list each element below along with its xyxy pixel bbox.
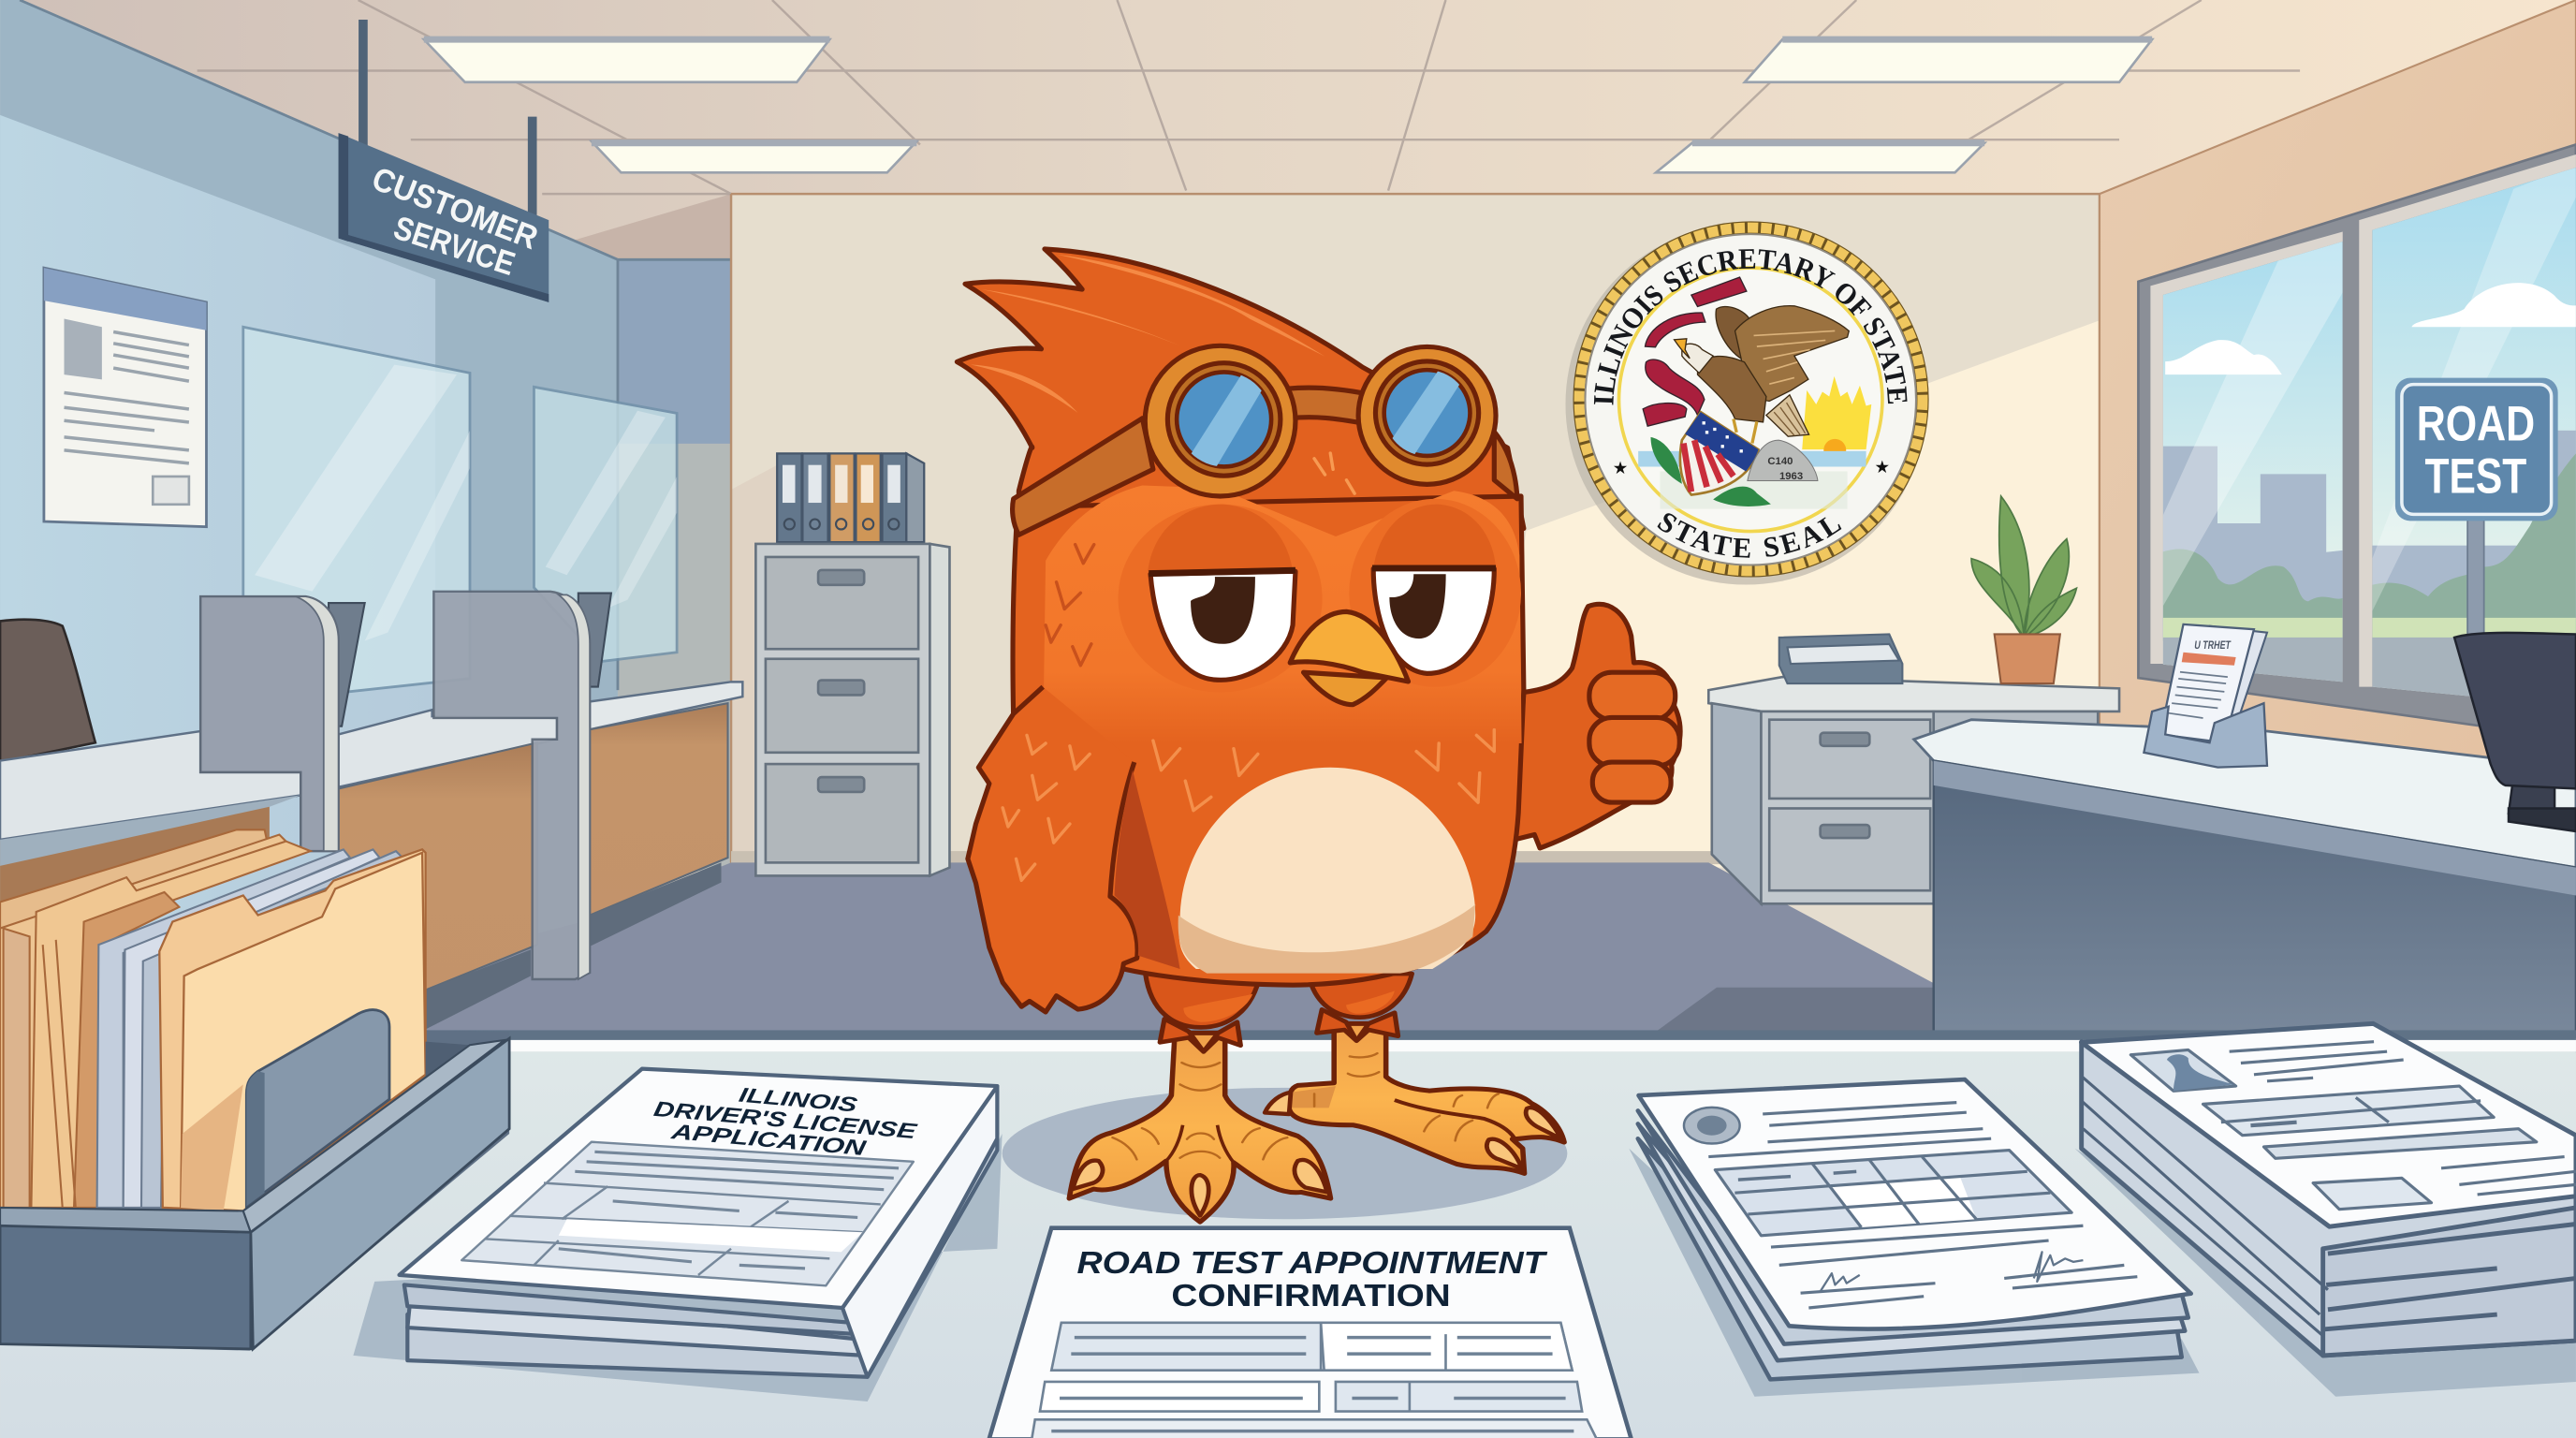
manila folders <box>0 829 311 1208</box>
seal shield <box>1680 412 1759 495</box>
seal rock and leaves <box>1651 437 1818 506</box>
front manila folder <box>159 849 426 1211</box>
reception desk <box>1914 720 2576 1051</box>
head crest <box>957 249 1524 539</box>
road test appointment confirmation <box>989 1228 1632 1438</box>
foreground desk <box>0 1030 2576 1438</box>
driver's license application stack <box>400 1069 997 1377</box>
foot shadow <box>1003 1088 1567 1219</box>
id document stack <box>2082 1023 2576 1356</box>
seal rock and leaves: 1963 <box>1779 471 1803 482</box>
seal eagle <box>1675 306 1849 444</box>
tray front face <box>0 1208 251 1232</box>
confirmation title: CONFIRMATION <box>1171 1279 1451 1313</box>
body <box>1013 496 1524 985</box>
computer monitor <box>2454 633 2576 831</box>
chair <box>0 620 95 762</box>
confirmation title: ROAD TEST APPOINTMENT <box>1076 1246 1548 1281</box>
right wall <box>2100 0 2576 920</box>
window <box>2136 144 2576 740</box>
customer service sign <box>339 20 549 302</box>
grey folders <box>97 849 402 1208</box>
beak <box>1290 611 1408 705</box>
brochure holder <box>2144 624 2267 768</box>
owl legs and feet <box>1069 974 1564 1222</box>
seal rock and leaves: C140 <box>1767 456 1793 467</box>
brochure holder: U TRHET <box>2193 638 2232 652</box>
customer service sign: CUSTOMER <box>367 160 543 257</box>
desk monitors and dividers <box>200 592 611 979</box>
paper tray on back desk <box>1779 634 1902 683</box>
customer service sign: SERVICE <box>389 210 520 283</box>
owl mascot <box>957 249 1680 1012</box>
document shadows <box>353 1134 2576 1401</box>
ceiling <box>0 0 2576 259</box>
application title <box>651 1083 919 1160</box>
leg tufts and thighs <box>1146 974 1412 1051</box>
grey divider <box>246 1010 389 1206</box>
belly <box>1179 768 1475 969</box>
owl left foot <box>1069 1033 1330 1222</box>
application form <box>461 1142 914 1285</box>
inner tray corner <box>426 1042 470 1077</box>
eye sockets <box>1119 499 1521 692</box>
eyes <box>1149 568 1496 680</box>
potted plant <box>1971 496 2076 683</box>
id document content <box>2130 1042 2576 1210</box>
back wall <box>731 194 2100 868</box>
filing cabinet <box>755 544 949 875</box>
state seal: ILLINOIS SECRETARY OF STATE <box>1593 249 1908 404</box>
wall poster <box>44 268 206 527</box>
binders <box>777 453 924 542</box>
application title: DRIVER'S LICENSE <box>651 1096 919 1143</box>
road test sign: ROAD <box>2417 396 2535 451</box>
state seal: ★ <box>1875 457 1890 477</box>
confirmation title <box>1076 1246 1548 1313</box>
right arm with thumbs up <box>1513 604 1680 848</box>
road test sign: TEST <box>2424 449 2526 505</box>
service counters <box>0 682 742 1030</box>
headband <box>1013 388 1517 535</box>
left wing <box>968 687 1137 1012</box>
road test sign <box>2395 378 2558 636</box>
tray back <box>0 1030 509 1351</box>
goggles <box>1145 345 1496 496</box>
state seal: ★ <box>1613 458 1629 477</box>
state seal: STATE SEAL <box>1657 513 1842 558</box>
folder tray with folders <box>0 829 509 1351</box>
confirmation form <box>1032 1323 1597 1438</box>
application title: ILLINOIS <box>737 1083 859 1116</box>
floor <box>337 862 1939 1042</box>
signed document stack <box>1638 1079 2191 1379</box>
owl right foot <box>1265 1023 1564 1173</box>
glass partitions <box>243 327 677 692</box>
left wall <box>0 0 731 1051</box>
back desk with drawers <box>1708 677 2119 903</box>
seal ribbon <box>1643 277 1747 426</box>
state seal <box>1565 221 1929 584</box>
tray side face <box>243 1040 505 1232</box>
application title: APPLICATION <box>668 1119 868 1160</box>
feather marks <box>1003 453 1494 880</box>
lighter face area <box>1043 486 1522 743</box>
ceiling lights <box>424 39 2152 172</box>
signed document content <box>1684 1103 2137 1308</box>
seal water and sun <box>1638 376 1871 509</box>
